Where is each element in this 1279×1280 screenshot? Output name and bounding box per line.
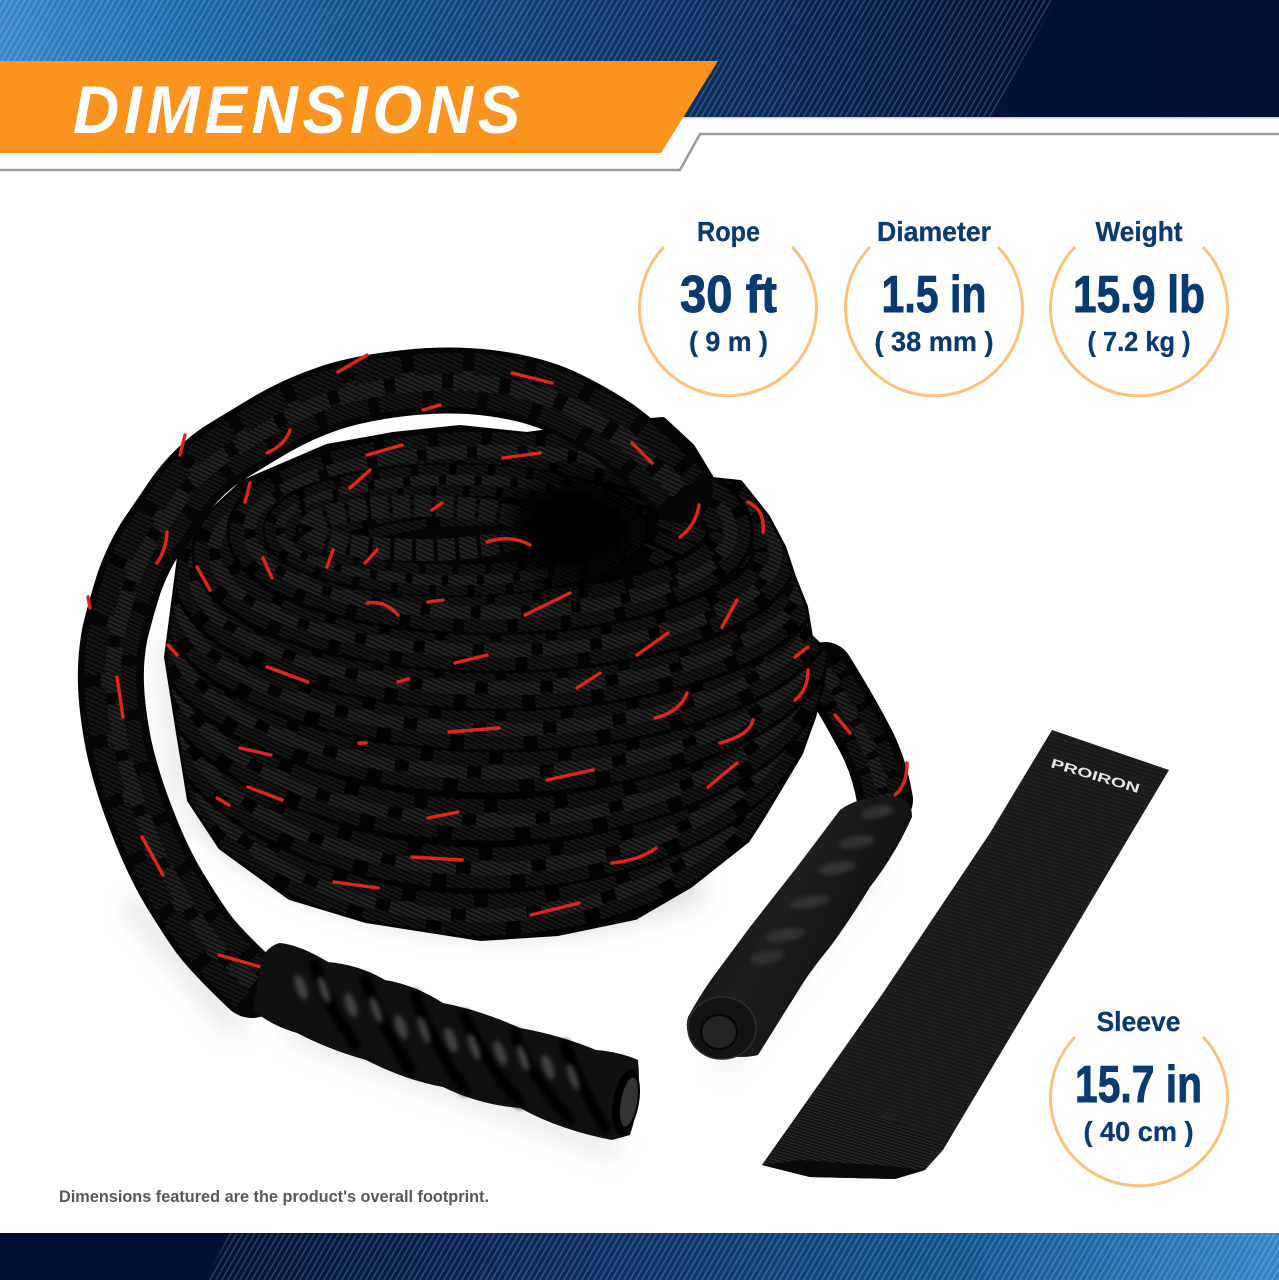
stat: weight: Weight [1096, 216, 1182, 247]
stat: weight: 15.9 lb [1073, 266, 1205, 324]
stat: diameter: Diameter [877, 216, 991, 247]
sleeve brand: PROIRON [1049, 755, 1142, 796]
rope outer loop [95, 363, 695, 1001]
rope shadow [130, 640, 880, 1150]
stat: rope length: Rope [697, 216, 760, 247]
stat: rope length: 30 ft [680, 266, 777, 324]
stat: diameter: 1.5 in [882, 266, 986, 324]
title banner [0, 61, 718, 153]
header outline stroke [0, 134, 1279, 170]
footer band [0, 1233, 1279, 1280]
stat: sleeve: Sleeve [1096, 1006, 1180, 1037]
red tracer marks [88, 355, 907, 967]
stat: diameter [846, 216, 1023, 396]
stat: sleeve: ( 40 cm ) [1084, 1116, 1194, 1147]
title: DIMENSIONS [73, 72, 525, 148]
stat: rope length: ( 9 m ) [689, 326, 768, 357]
sleeve [762, 730, 1169, 1179]
footnote: Dimensions featured are the product's overall footprint. [59, 1187, 489, 1206]
left handle [253, 943, 645, 1140]
right handle [687, 797, 912, 1059]
stat: diameter: ( 38 mm ) [874, 326, 994, 357]
rope tail to right handle [814, 664, 896, 806]
stat: weight [1050, 216, 1227, 396]
stat: weight: ( 7.2 kg ) [1088, 326, 1190, 357]
stat: sleeve: 15.7 in [1075, 1056, 1202, 1114]
header band [0, 0, 1279, 118]
rope coil [157, 420, 833, 938]
stat: rope length [639, 216, 816, 396]
stat: sleeve [1050, 1006, 1227, 1186]
